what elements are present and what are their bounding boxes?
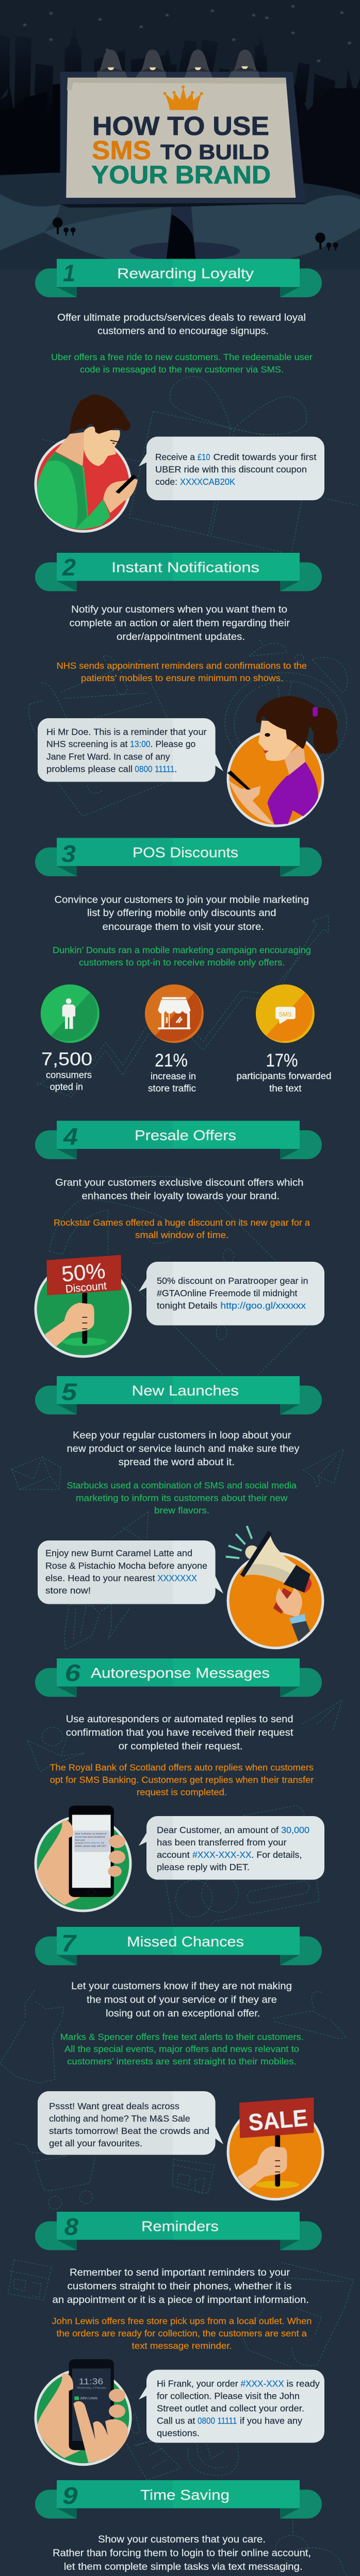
intro text: new product or service launch and make sure they [67,1443,300,1454]
panel: section 9 time saving [35,2480,323,2576]
intro text: an appointment or it is a piece of important information. [53,2294,309,2306]
speech bubble: bank transfer: has been transferred from your [157,1837,287,1848]
intro text [67,1430,300,1468]
speech bubble: NHS reminder [38,718,223,782]
panel: section 7 missed chances [35,1927,323,2199]
intro text: or completed their request. [119,1741,242,1752]
speech bubble: NHS reminder: 0800 11111 [135,764,174,774]
intro text [55,1177,303,1201]
intro text: Use autoresponders or automated replies to send [66,1714,293,1725]
city skyline [0,28,360,195]
ribbon heading 7: Missed Chances [127,1934,244,1950]
ribbon heading 9 [35,2480,322,2518]
example text: small window of time. [135,1230,228,1240]
illustration: 50% discount sign: 50% [60,1258,106,1286]
speech bubble: Uber coupon: £10 [198,452,210,462]
hills and trees [0,173,360,269]
intro text: losing out on an exceptional offer. [106,2008,260,2019]
speech bubble: order ready: 0800 11111 [198,2416,237,2426]
illustration: phone showing bank message: account #XXX-XXX-XX. For [75,1842,105,1844]
title [91,111,271,189]
intro text [69,604,290,642]
ribbon heading 9: 9 [62,2482,78,2509]
illustration: megaphone [226,1526,323,1648]
ribbon heading 4: Presale Offers [135,1127,236,1143]
title: YOUR BRAND [91,161,271,189]
example text: the orders are ready for collection, the customers are sent a [57,2328,307,2338]
panel: section 8 reminders [35,2212,324,2465]
speech bubble: order ready: is ready [287,2378,320,2388]
speech bubble: bank transfer: 30,000 [281,1825,309,1835]
speech bubble: order ready: questions. [157,2428,200,2438]
header scene: night city with billboard [0,0,360,269]
intro text: customers and to encourage signups. [97,326,269,337]
speech bubble: Uber coupon: Credit towards your first [214,452,317,462]
illustration: phone showing bank message: Dear Customer, an amount of [75,1833,107,1835]
speech bubble: bank transfer: #XXX-XXX-XX [192,1850,252,1860]
speech bubble: Uber coupon: UBER ride with this discount coupon [155,464,307,474]
ribbon heading 8: 8 [64,2213,78,2240]
example text: marketing to inform its customers about their new [76,1493,288,1503]
speech bubble: bank transfer [139,1816,324,1879]
illustration: hands holding phone lock screen: 11:36 [79,2377,103,2386]
speech bubble: order ready: Call us at [157,2416,195,2426]
speech bubble: GTA discount: tonight Details [157,1300,218,1311]
panel: section 4 presale offers [35,1121,324,1357]
speech bubble: new latte: XXXXXXX [157,1573,197,1583]
intro text [57,312,306,337]
speech bubble: NHS reminder: . [174,764,177,774]
ribbon heading 5: New Launches [132,1383,239,1399]
speech bubble: order ready: Hi Frank, your order [157,2378,238,2388]
speech bubble: NHS reminder: Hi Mr Doe. This is a reminder that your [46,726,207,737]
speech bubble: new latte: Enjoy new Burnt Caramel Latte and [45,1548,192,1558]
intro text: spread the word about it. [119,1456,235,1468]
panel: section 5 new launches [35,1376,323,1648]
ribbon heading 3: 3 [61,840,76,867]
title: TO BUILD [160,140,269,164]
intro text: enhances their loyalty towards your brand. [81,1190,280,1201]
example text: The Royal Bank of Scotland offers auto replies when customers [50,1762,314,1772]
example text: Dunkin’ Donuts ran a mobile marketing campaign encouraging [53,945,311,955]
intro text: Show your customers that you care. [98,2534,266,2545]
example text [67,1480,297,1516]
ribbon heading 3 [35,838,322,876]
example text: All the special events, major offers and news relevant to [64,2044,299,2054]
speech bubble: new latte: store now! [45,1585,91,1596]
illustration: man reading phone [36,394,138,532]
illustration: hands holding phone lock screen: Wednesday, 3 February [77,2386,106,2389]
ribbon heading 1: 1 [63,260,75,286]
intro text: Notify your customers when you want them to [71,604,287,615]
icon: crown [163,86,203,110]
ribbon heading 4 [35,1121,322,1159]
example text [57,660,307,683]
intro text: let them complete simple tasks via text messaging. [64,2561,303,2572]
intro text [71,1980,292,2019]
intro text: Rather than forcing them to login to their online account, [53,2547,311,2558]
intro text: order/appointment updates. [117,631,245,642]
intro text: confirmation that you have received their request [66,1727,293,1738]
example text: code is messaged to the new customer via SMS. [80,364,284,375]
speech bubble: new latte: else. Head to your nearest [45,1573,155,1583]
ribbon heading 8: Reminders [141,2218,219,2234]
speech bubble: GTA discount: 50% discount on Paratrooper gear in [157,1276,308,1286]
speech bubble: bank transfer: please reply with DET. [157,1862,250,1872]
intro text: the most out of your service or if they are [87,1994,277,2005]
ribbon heading 5: 5 [61,1379,78,1405]
illustration: 50% discount sign: Discount [65,1280,107,1295]
illustration: 50% discount sign [36,1255,130,1357]
example text: John Lewis offers free store pick ups from a local outlet. When [52,2316,312,2326]
stat: 17% forwarded: the text [269,1083,301,1094]
example text: customers to opt-in to receive mobile only offers. [79,957,285,968]
speech bubble: new latte [38,1540,223,1604]
example text [52,2316,312,2351]
stat: 7,500 consumers: consumers [46,1070,92,1080]
ribbon heading 6 [35,1658,322,1697]
speech bubble: GTA discount: #GTAOnline Freemode til midnight [157,1288,298,1298]
intro text [55,894,309,933]
stat: 17% forwarded [236,985,331,1094]
example text: Marks & Spencer offers free text alerts to their customers. [60,2031,304,2042]
intro text: Let your customers know if they are not making [71,1980,292,1992]
stat: 21% store traffic: store traffic [148,1083,196,1094]
example text: Rockstar Games offered a huge discount on its new gear for a [54,1217,310,1228]
speech bubble: bank transfer: . For details, [252,1850,302,1860]
speech bubble: order ready: for collection. Please visit the John [157,2391,300,2401]
example text: Starbucks used a combination of SMS and social media [67,1480,297,1490]
speech bubble: order ready: #XXX-XXX [240,2378,284,2388]
speech bubble: NHS reminder: NHS screening is at [46,739,128,749]
speech bubble: NHS reminder: 13:00 [130,739,151,749]
speech bubble: order ready: if you have any [240,2416,302,2426]
ribbon heading 8 [35,2212,322,2250]
example text: text message reminder. [132,2341,232,2351]
illustration: woman on phone [227,696,338,826]
billboard post and shadow [130,204,240,260]
speech bubble: Uber coupon [139,437,324,500]
example text [54,1217,310,1240]
ribbon heading 1: Rewarding Loyalty [117,265,254,281]
illustration: phone showing bank message: from your [75,1839,85,1841]
speech bubble: order ready: Street outlet and collect your order. [157,2403,304,2413]
example text: brew flavors. [154,1505,209,1516]
stat: 17% forwarded: 17% [266,1050,298,1071]
ribbon heading 3: POS Discounts [133,844,238,860]
intro text: Remember to send important reminders to your [70,2267,290,2278]
stat: 7,500 consumers: opted in [50,1082,83,1092]
illustration: phone showing bank message: details, please reply with DET. [75,1845,107,1848]
ribbon heading 9: Time Saving [140,2487,230,2503]
billboard frame [60,72,305,208]
speech bubble: M&S sale [38,2091,223,2155]
intro text: Grant your customers exclusive discount offers which [55,1177,303,1188]
intro text [53,2267,309,2306]
illustration: sale sign [228,2097,323,2199]
stat: 17% forwarded: participants forwarded [236,1071,331,1081]
speech bubble: M&S sale: clothing and home? The M&S Sale [49,2113,190,2124]
speech bubble: Uber coupon: code: [155,477,177,487]
ribbon heading 2: Instant Notifications [111,560,259,575]
intro text: complete an action or alert them regarding their [69,617,290,629]
stat: 21% store traffic: increase in [151,1071,196,1081]
billboard poster surface [66,71,296,198]
speech bubble: new latte: Rose & Pistachio Mocha before anyone [45,1561,207,1571]
illustration: phone showing bank message [36,1806,130,1911]
ribbon heading 4: 4 [63,1123,78,1150]
example text [60,2031,304,2066]
speech bubble: M&S sale: Pssst! Want great deals across [49,2101,179,2111]
example text: opt for SMS Banking. Customers get replies when their transfer [50,1774,314,1785]
panel: section 3 POS discounts [35,838,332,1094]
speech bubble: GTA discount: http://goo.gl/xxxxxx [220,1300,306,1311]
speech bubble: NHS reminder: . Please go [151,739,195,749]
speech bubble: bank transfer: account [157,1850,190,1860]
stat: 7,500 consumers: 7,500 [41,1049,92,1070]
intro text: Offer ultimate products/services deals to reward loyal [57,312,306,324]
speech bubble: NHS reminder: problems please call [46,764,133,774]
ribbon heading 6: 6 [65,1659,80,1686]
ribbon heading 1 [35,259,322,297]
illustration: hands holding phone lock screen [36,2359,130,2465]
ribbon heading 5 [35,1376,322,1415]
ribbon heading 7: 7 [61,1930,77,1957]
intro text: Keep your regular customers in loop about your [73,1430,291,1441]
speech bubble: bank transfer: Dear Customer, an amount of [157,1825,279,1835]
intro text: list by offering mobile only discounts and [87,907,276,919]
stat: 7,500 consumers [41,985,100,1092]
example text [53,945,311,968]
stat: 17% forwarded: SMS [279,1011,292,1018]
speech bubble: order ready [139,2370,324,2443]
ribbon heading 6: Autoresponse Messages [91,1665,270,1681]
panel: section 1 rewarding loyalty [35,259,324,532]
example text: NHS sends appointment reminders and confirmations to the [57,660,307,671]
example text: patients’ mobiles to ensure minimum no shows. [81,673,283,683]
stat: 21% store traffic [145,985,204,1094]
example text: Uber offers a free ride to new customers. The redeemable user [51,352,313,362]
title: HOW TO USE [92,111,269,141]
stat: 21% store traffic: 21% [155,1050,188,1071]
illustration: hands holding phone lock screen: John Lewis [80,2397,97,2400]
ribbon heading 2 [35,553,322,591]
intro text: encourage them to visit your store. [102,921,264,933]
stars [14,4,352,70]
ribbon heading 2: 2 [62,554,76,581]
speech bubble: GTA discount [139,1262,324,1325]
speech bubble: Uber coupon: Receive a [155,452,195,462]
intro text: Convince your customers to join your mobile marketing [55,894,309,906]
intro text [66,1714,293,1752]
illustration: sale sign: SALE [247,2104,308,2136]
panel: section 2 instant notifications [35,553,338,826]
example text [51,352,313,375]
speech bubble: NHS reminder: Jane Fret Ward. In case of any [46,752,170,762]
speech bubble: M&S sale: starts tomorrow! Beat the crowds and [49,2126,209,2136]
intro text [53,2534,311,2572]
panel: section 6 autoresponse messages [35,1658,324,1911]
speech bubble: Uber coupon: XXXXCAB20K [180,477,235,487]
example text [50,1762,314,1797]
example text: request is completed. [137,1787,227,1797]
ribbon heading 7 [35,1927,322,1965]
intro text: customers straight to their phones, whether it is [67,2281,292,2292]
illustration: phone showing bank message: 30,000 has been transferred [75,1836,105,1838]
speech bubble: M&S sale: get all your favourites. [49,2138,142,2148]
title: SMS [92,135,151,165]
billboard lamps [100,49,257,71]
example text: customers’ interests are sent straight to their mobiles. [67,2056,297,2066]
